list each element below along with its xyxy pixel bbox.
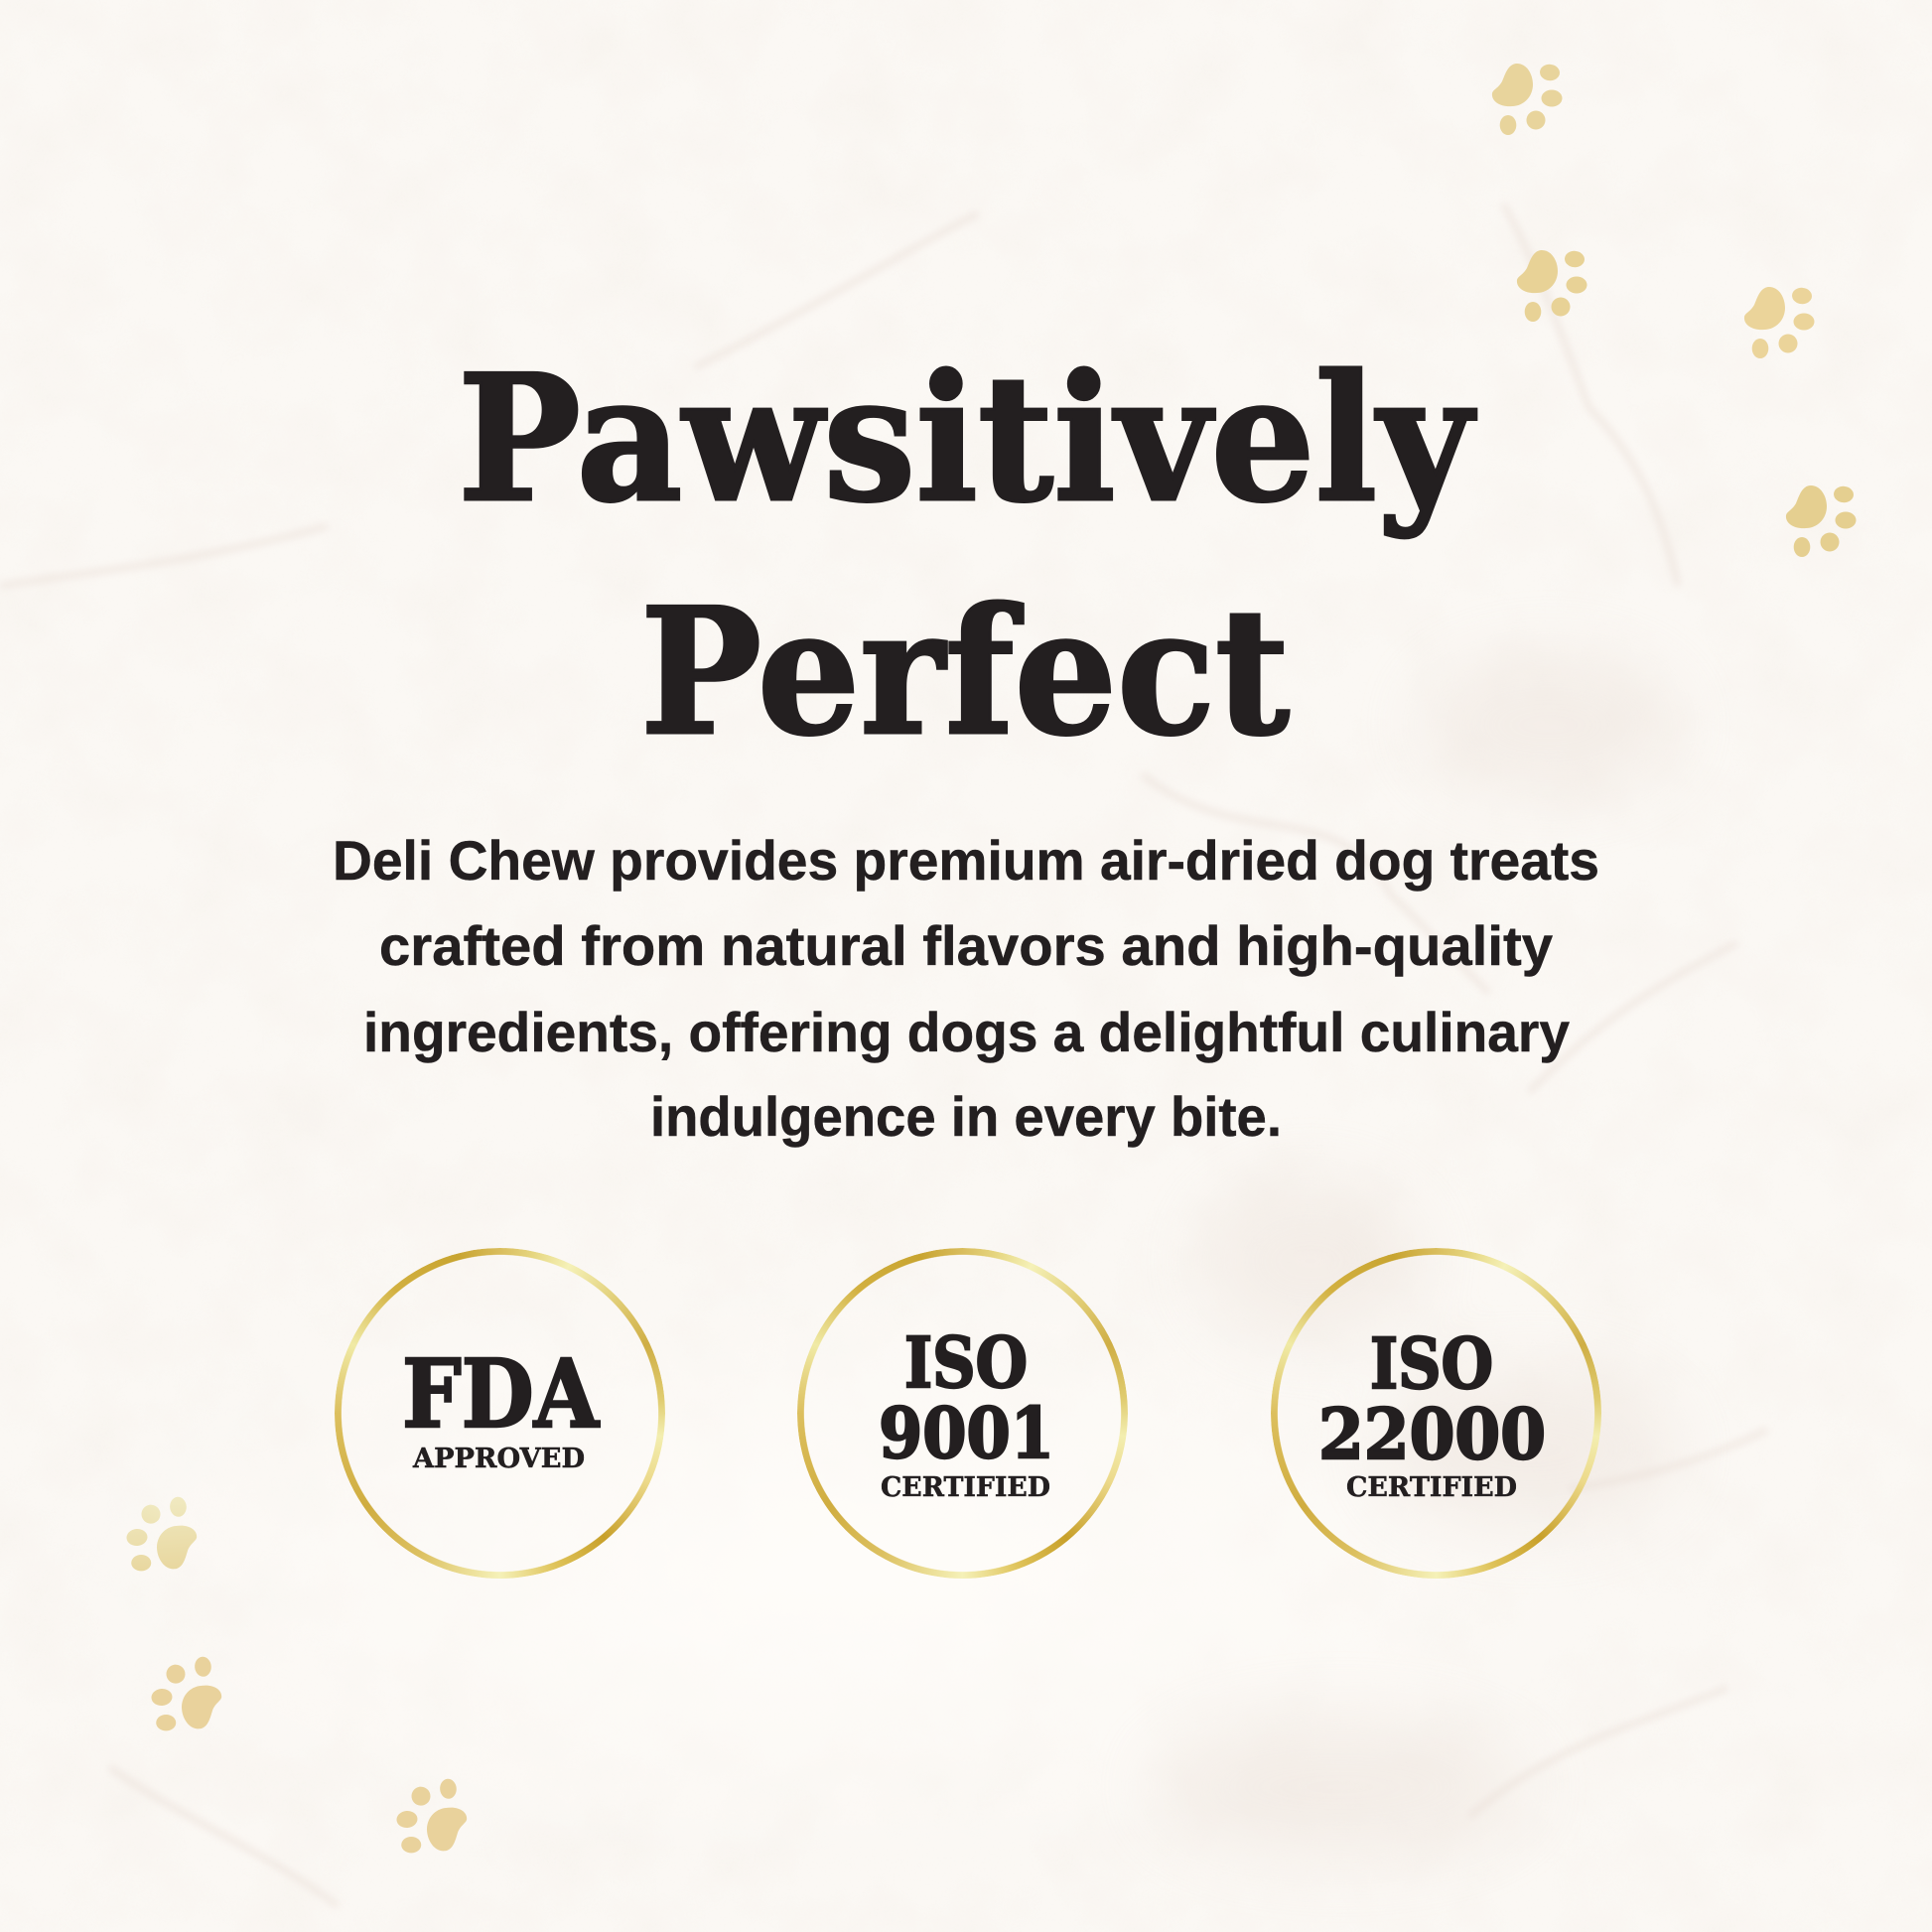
icon: paw print top 2 [1517,250,1587,322]
badge ring: FDA [335,1248,665,1579]
badge text: ISO 22000 certified [1318,1322,1546,1503]
body line 1: Deli Chew provides premium air-dried dog treats [333,829,1599,892]
title [458,338,1476,774]
body line 2: crafted from natural flavors and high-quality [379,914,1553,977]
icon: paw print bottom left 3 [393,1777,470,1855]
badge text: ISO 22000 certified: 22000 [1318,1393,1546,1475]
title line 1: Pawsitively [458,338,1476,541]
body line 4: indulgence in every bite. [650,1085,1282,1148]
badge text: ISO 9001 certified: 9001 [879,1392,1054,1474]
badge text: ISO 9001 certified: ISO [904,1321,1028,1404]
badge text: FDA approved: APPROVED [412,1444,585,1474]
icon: paw print right 1 [1744,287,1815,358]
icon: paw print bottom left 2 [148,1655,224,1732]
badge text: ISO 22000 certified: ISO [1370,1322,1493,1405]
icon: paw print right 2 [1786,485,1857,557]
badge ring: ISO 22000 [1271,1248,1601,1579]
badge ring: ISO 9001 [797,1248,1128,1579]
icon: paw print top 1 [1492,64,1563,135]
icon: paw print bottom left 1 [123,1495,200,1573]
body line 3: ingredients, offering dogs a delightful culinary [363,1001,1570,1063]
badge text: ISO 9001 certified [879,1321,1054,1503]
body text [333,829,1599,1148]
title line 2: Perfect [640,571,1290,774]
badge text: ISO 22000 certified: CERTIFIED [1346,1472,1517,1503]
badge text: ISO 9001 certified: CERTIFIED [881,1472,1050,1503]
badge text: FDA approved: FDA [402,1339,600,1449]
